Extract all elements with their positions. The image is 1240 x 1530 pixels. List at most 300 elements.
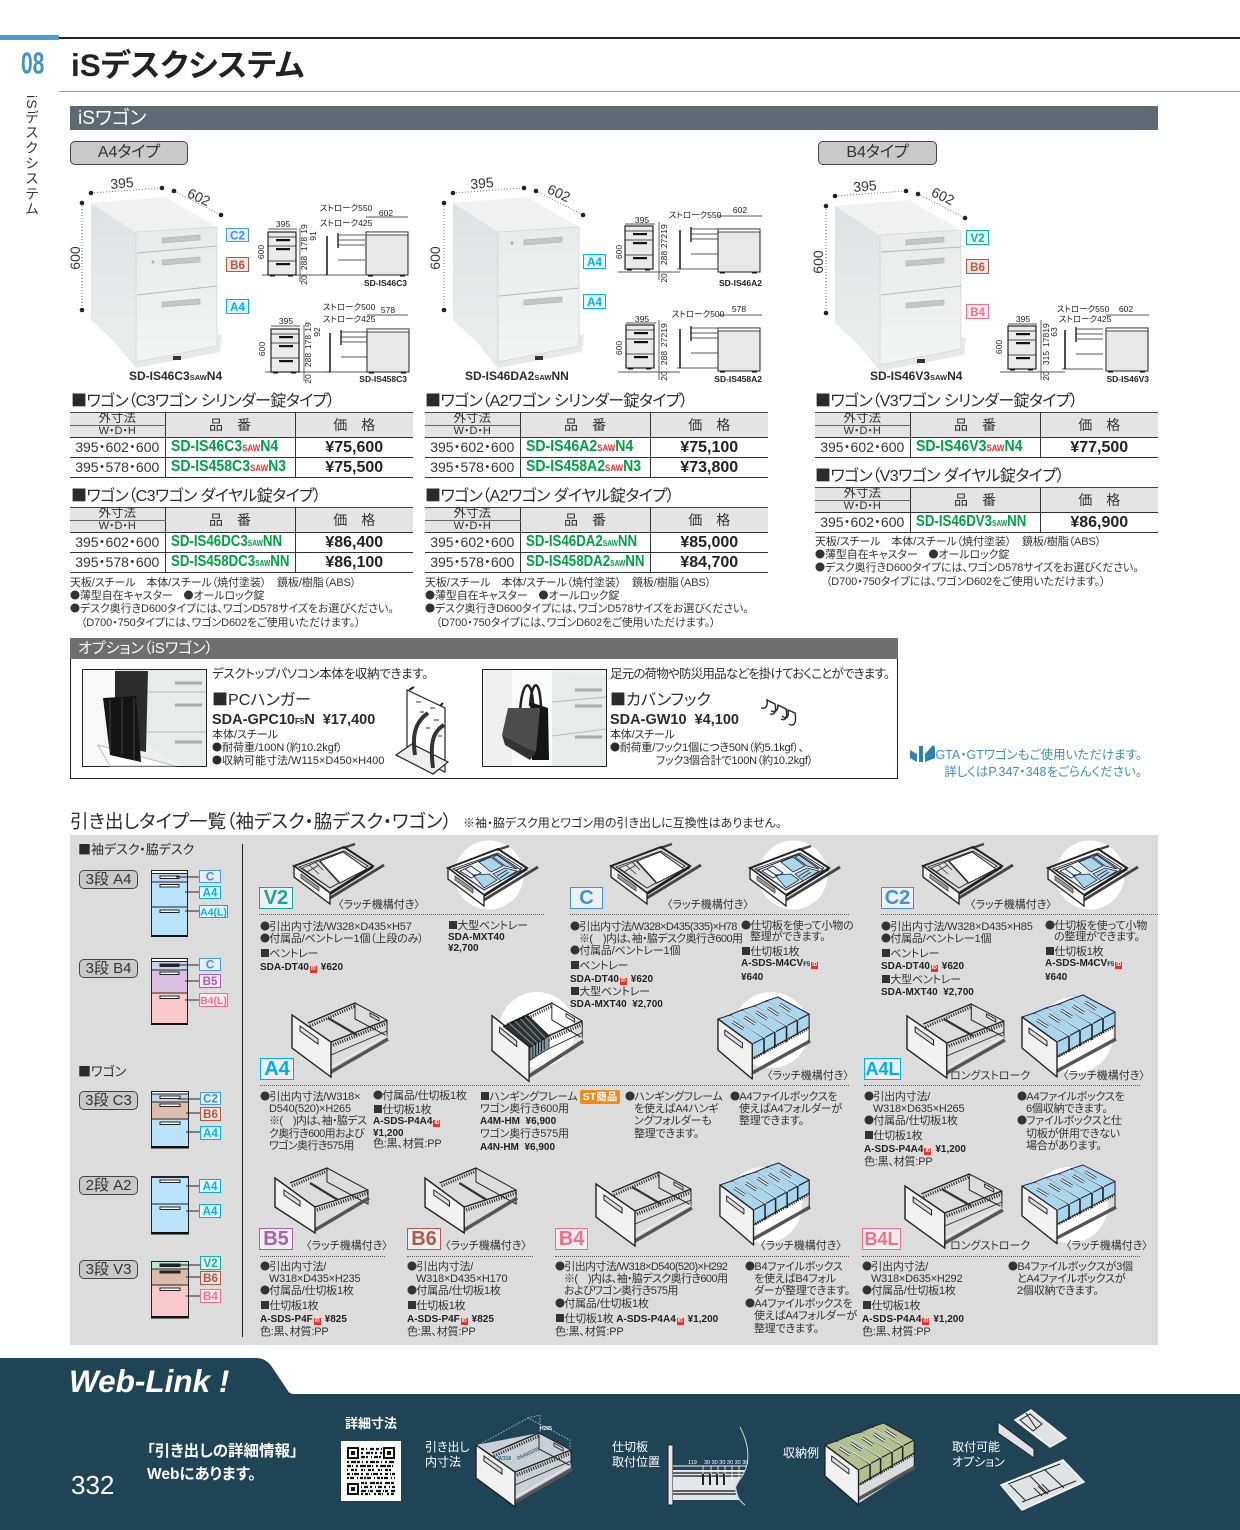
specs: PC hanger: 本体/スチール [212,729,278,741]
spec: B4: およびワゴン奥行き575用 [564,1285,678,1297]
section bar: iS wagon [70,106,1158,130]
spec: C2 divider [1045,920,1147,984]
spec: C2: ID [932,965,937,971]
badge: B4: B4 [559,1228,584,1250]
B4 type pill: B4タイプ [846,144,909,161]
table: V3 cylinder: 品 番 [954,417,996,433]
label: divider position: 仕切板 [612,1440,648,1454]
spec: A4 file box note: 整理できます。 [739,1115,804,1127]
spec: C2 divider: ID [1116,962,1121,968]
table: C3 dial: ¥86,400 [325,534,383,551]
illustration: V2 tray [292,842,385,906]
table: A2 dial [425,507,768,573]
dimension drawing: SD-IS458A2: 578 [732,304,746,314]
dimension drawing: SD-IS46C3: ストローク550 [319,203,373,213]
dimension drawing: SD-IS46A2: 600 [614,245,624,259]
spec: A4: ク奥行き600用および [269,1128,364,1140]
specs: bag hook: フック3個合計で100N（約10.2kgf） [656,755,813,767]
diagram: 3 tier A4: A4 [203,888,218,900]
subheading: side desk: ■袖デスク・脇デスク [78,839,194,858]
spec: C divider: 整理ができます。 ■仕切板1枚 [741,931,825,958]
product photo: V3 wagon: 395 [853,177,878,195]
spec: A4 accessory: ●付属品/仕切板1枚 ■仕切板1枚 [373,1086,467,1116]
diagram: 3 tier V3: B4 [203,1291,218,1303]
product photo: C3 wagon: 600 [67,246,83,270]
illustration: C tray with divider [745,838,845,912]
label: inner dimensions: 内寸法 [425,1454,461,1468]
dimension drawing: SD-IS46V3: SD-IS46V3 [1106,374,1149,384]
table: C3 dial: 395・602・600 [75,534,159,550]
illustration: C tray [607,840,702,910]
dimension drawing: SD-IS458A2: SD-IS458A2 [714,374,762,384]
table: A2 cylinder [425,412,768,478]
spec: B4: ※( )内は、袖・脇デスク奥行き600用 [564,1273,727,1285]
subheading: wagon: ■ワゴン [78,1061,126,1080]
dimension drawing: SD-IS458C3: 578 [381,305,395,315]
badge: C2: C2 [885,887,910,909]
spec: V2 large pen tray: ¥2,700 [448,943,479,954]
dimension drawing: SD-IS46V3: 600 [994,340,1004,354]
spec: A4 accessory: ¥1,200 [373,1128,404,1138]
spec: C2: ■大型ベントレー [881,971,961,986]
dimension drawing: SD-IS458C3: 288 [303,353,313,367]
panel: options [70,638,898,779]
table: C3 cylinder: ¥75,500 [325,459,383,476]
table: V3 cylinder: 価 格 [1078,417,1120,433]
icon: drawer with dimensions [474,1412,574,1514]
product photo: C3 wagon: C2 [230,230,245,242]
label: compatible options: オプション [952,1454,1005,1468]
notes: V3: 天板/スチール 本体/スチール（焼付塗装） 鏡板/樹脂（ABS） [815,536,1101,548]
model and price: PC hanger: SDA-GPC10F5N ¥17,400 [212,712,375,728]
dimension drawing: SD-IS46C3: 395 [276,219,290,229]
vertical chapter label: iSデスクシステム [24,95,40,217]
table: V3 cylinder: SD-IS46V3SAWN4 [916,438,1022,455]
spec: B4: 色:黒、材質:PP [555,1326,624,1338]
dimension drawing: SD-IS458A2: ストローク500 [671,309,725,319]
spec: A4 file box note: 使えばA4フォルダーが [739,1103,842,1115]
title: iSデスクシステム [71,47,304,83]
label: inner dimensions: 引き出し [425,1440,470,1454]
spec: A4 hanging frame: ■ハンギングフレーム [480,1088,578,1102]
spec: C divider: ●仕切板を使って小物の [741,916,853,932]
spec: A4: ※( )内は、袖・脇デス [269,1115,366,1127]
pill: 3 tier B4 [79,959,138,978]
spec: A4 hanging note: ングフォルダーも [634,1115,712,1127]
label: compatible options [952,1440,1005,1469]
dimension drawing: SD-IS46C3: SD-IS46C3 [364,278,407,288]
specs: PC hanger: ●耐荷重/100N（約10.2kgf） [212,739,342,754]
spec: C: ID [621,978,626,984]
spec: B4L note: 2個収納できます。 [1017,1285,1099,1297]
A4 type pill: A4タイプ [98,144,160,161]
spec: A4L note: 場合があります。 [1026,1140,1102,1152]
table: V3 dial: ¥86,900 [1070,514,1128,531]
badge: A4L: A4L [865,1059,900,1079]
dimension drawing: SD-IS46A2: 19 [659,224,669,234]
text: bag hook description: 足元の荷物や防災用品などを掛けておくことができます。 [610,667,889,681]
dimension drawing: SD-IS46A2: 20 [659,273,669,283]
spec: A4L: ●付属品/仕切板1枚 ■仕切板1枚 [864,1112,958,1142]
dimension drawing: SD-IS46V3 [994,304,1149,384]
A4 type pill [70,141,188,165]
model and price: bag hook: SDA-GW10 ¥4,100 [610,712,739,728]
table: C3 dial: 品 番 [209,512,251,528]
table: A2 dial: 395・602・600 [430,534,514,550]
table: C3 cylinder: 価 格 [333,417,375,433]
badge: C: C [579,887,594,909]
spec: A4 accessory: ID [434,1120,439,1126]
spec: A4 hanging frame: A4M-HM ¥6,900 [480,1116,556,1127]
product photo: C3 wagon: 602 [185,185,213,209]
panel: Web-Link footer [0,1358,1240,1530]
spec: B6: ●引出内寸法/ [407,1258,473,1272]
spec: C divider: ¥640 [741,972,763,983]
product photo: C3 wagon: A4 [230,302,245,314]
dimension drawing: SD-IS46V3: 178 [1041,333,1051,347]
spec: B4L: W318×D635×H292 [871,1273,962,1285]
spec: C2: ●付属品/ベントレー1個 ■ベントレー [881,930,991,960]
illustration: A4 hanging frame [488,990,588,1084]
spec: V2 [260,921,423,974]
spec: C2 divider: A-SDS-M4CVF5 [1045,958,1114,969]
label: compatible options: 取付可能 [952,1440,1000,1454]
spec: C divider: ID [812,962,817,968]
options header [70,638,898,659]
badge: B5: B5 [263,1228,289,1250]
specs: bag hook: 本体/スチール [610,729,675,741]
options header: オプション（iSワゴン） [78,640,213,657]
badge: B6: B6 [411,1228,437,1250]
heading: bag hook: ■カバンフック [610,686,711,710]
spec: A4L note [1017,1090,1125,1153]
spec: B6: A-SDS-P4F ¥825 [407,1314,494,1325]
dimension drawing: SD-IS458C3: 20 [303,374,313,384]
diagram: 3 tier B4: B5 [203,976,218,988]
product photo: A2 wagon: A4 [587,257,602,269]
pill: 3 tier A4 [79,870,138,889]
notes: C3: 天板/スチール 本体/スチール（焼付塗装） 鏡板/樹脂（ABS） [70,577,356,589]
table: A2 cylinder: SD-IS46A2SAWN4 [526,438,633,455]
table: C3 cylinder: 395・602・600 [75,439,159,455]
dimension drawing: SD-IS46V3: 20 [1041,371,1051,381]
table: A2 dial: 価 格 [688,512,730,528]
pill: 2 tier A2 [79,1176,138,1195]
notes: C3: ●デスク奥行きD600タイプには、ワゴンD578サイズをお選びください。 [70,600,394,615]
diagram: 3 tier V3: V2 [203,1258,218,1270]
table: A2 cylinder: ¥75,100 [680,439,738,456]
latch note: 〈ラッチ機構付き〉 [667,899,749,911]
spec: B6: 色:黒、材質:PP [407,1326,476,1338]
table: C3 dial: 395・578・600 [75,554,159,570]
page number: 332 [71,1470,114,1500]
spec: C2 divider: ●仕切板を使って小物 [1045,916,1147,932]
dimension drawing: SD-IS46A2: 272 [659,234,669,248]
latch note: 〈ラッチ機構付き〉 [445,1240,527,1252]
spec: B5: ID [315,1318,320,1324]
table: V3 dial: 395・602・600 [820,514,904,530]
dimension drawing: SD-IS46C3: 91 [308,231,318,241]
table: A2 cylinder: 価 格 [688,417,730,433]
dimension drawing: SD-IS458C3: 395 [279,316,293,326]
notes: C3 [70,576,394,629]
table: C3 cylinder: 395・578・600 [75,459,159,475]
dimension drawing: SD-IS458A2: 395 [635,314,649,324]
table: C3 cylinder: 品 番 [209,417,251,433]
dimension drawing: SD-IS458C3: 178 [303,335,313,349]
spec: A4L note: ●ファイルボックスと仕 [1017,1112,1122,1127]
table: V3 cylinder: ¥77,500 [1070,439,1128,456]
dimension drawing: SD-IS46C3 [256,203,408,288]
spec: A4L: 色:黒、材質:PP [864,1156,932,1168]
dimension drawing: SD-IS46V3: 315 [1041,351,1051,365]
spec: A4 [260,1090,366,1153]
spec: A4L note: ●A4ファイルボックスを [1017,1088,1125,1102]
spec: B4 note: 整理できます。 [754,1323,819,1335]
spec: B4 note: ●A4ファイルボックスを [745,1295,853,1310]
notes: A2: ●薄型自在キャスター ●オールロック錠 [425,587,619,602]
spec: C2 divider: の整理ができます。 ■仕切板1枚 [1045,931,1140,958]
table: A2 cylinder: 395・578・600 [430,459,514,475]
diagram: 2 tier A2: A4 [203,1181,218,1193]
badge: B4L: B4L [864,1229,898,1249]
web info text [147,1441,298,1486]
icon: drawer with dimensions: W318 [498,1456,511,1462]
diagram: 2 tier A2: A4 [203,1206,218,1218]
spec: C: ●付属品/ベントレー1個 ■ベントレー [570,942,680,972]
diagram: 3 tier B4: C [206,960,214,972]
spec: A4 hanging note: 整理できます。 [634,1128,699,1140]
illustration: B4L drawer [903,1172,1005,1252]
spec: B5: ●付属品/仕切板1枚 ■仕切板1枚 [260,1282,354,1312]
spec: A4L note: 切板が併用できない [1026,1128,1120,1140]
latch note: 〈ラッチ機構付き〉 [970,899,1052,911]
icon: PC hanger [394,686,449,775]
detail size label: 詳細寸法 [345,1416,397,1431]
product photo: V3 wagon [810,177,989,371]
illustration: B5 drawer [272,1165,372,1237]
icon: bag hook [760,698,796,726]
pill: 3 tier V3 [79,1260,138,1279]
table: A2 cylinder: SD-IS458A2SAWN3 [526,458,641,475]
icon: GTA book [910,745,935,762]
spec: A4 accessory: 色:黒、材質:PP [373,1138,442,1150]
icon: storage example [821,1420,917,1508]
dimension drawing: SD-IS458A2: 288 [659,351,669,365]
spec: V2 large pen tray [448,921,528,954]
dimension drawing: SD-IS458C3 [257,302,410,384]
illustration: B4 file box [716,1160,814,1250]
illustration: V2 tray with insert [446,840,539,910]
model name: V3: SD-IS46V3SAWN4 [870,369,962,383]
spec: B5 [260,1260,360,1338]
notes: C3: （D700・750タイプには、ワゴンD602をご使用いただけます。） [81,617,360,629]
dimension drawing: SD-IS46C3: 178 [299,237,309,251]
spec: B4 [555,1260,727,1338]
spec: B5: W318×D435×H235 [269,1273,360,1285]
notes: A2: 天板/スチール 本体/スチール（焼付塗装） 鏡板/樹脂（ABS） [425,577,711,589]
spec: A4L: ●引出内寸法/ [864,1088,930,1102]
chapter number: 08 [21,46,44,80]
product photo: V3 wagon: V2 [970,233,985,245]
illustration: A4L drawer [905,1002,1007,1082]
chapter tab [0,35,59,40]
diagram: 3 tier A4 [151,870,228,937]
product photo: C3 wagon: B6 [230,260,245,272]
spec: V2 large pen tray: SDA-MXT40 [448,932,505,943]
table: V3 dial [815,487,1158,533]
notes: A2 [425,576,749,629]
spec: V2: ID [311,966,316,972]
dimension drawing: SD-IS46V3: 19 [1041,323,1051,333]
diagram: 3 tier C3: A4 [203,1128,218,1140]
spec: C2: SDA-DT40 ¥620 [881,961,964,972]
heading: V3 cylinder: ■ワゴン（V3ワゴン シリンダー錠タイプ） [815,387,1078,411]
spec: C2 divider: ¥640 [1045,972,1067,983]
notes: A2: ●デスク奥行きD600タイプには、ワゴンD578サイズをお選びください。 [425,600,749,615]
notes: A2: （D700・750タイプには、ワゴンD602をご使用いただけます。） [436,617,715,629]
dimension drawing: SD-IS46C3: 20 [299,275,309,285]
dimension drawing: SD-IS458C3: 600 [257,342,267,356]
dimension drawing: SD-IS458C3: ストローク425 [322,314,376,324]
spec: C2: SDA-MXT40 ¥2,700 [881,987,974,998]
diagram: 3 tier C3: C2 [203,1094,218,1106]
diagram: 3 tier B4: B4(L) [200,995,227,1007]
spec: B4 note: ダーが整理できます。 [754,1285,850,1297]
latch note: 〈ラッチ機構付き〉 [767,1070,849,1082]
diagram: 2 tier A2 [151,1176,221,1234]
text: GTA note [935,748,1142,779]
specs: PC hanger: ●収納可能寸法/W115×D450×H400 [212,752,384,767]
Web-Link logo: Web-Link ! [69,1363,229,1399]
dimension drawing: SD-IS458A2: 600 [614,341,624,355]
dimension drawing: SD-IS46V3: ストローク550 [1056,304,1110,314]
text: GTA note: GTA・GTワゴンもご使用いただけます。 [935,748,1142,762]
model name: A2: SD-IS46DA2SAWNN [465,369,569,383]
table: V3 dial: SD-IS46DV3SAWNN [916,513,1026,530]
product photo: C3 wagon [67,174,249,368]
spec: V2: ●付属品/ベントレー1個（上段のみ） ■ベントレー [260,930,423,960]
text: PC hanger description: デスクトップパソコン本体を収納できます。 [212,667,428,681]
spec: C: SDA-DT40 ¥620 [570,974,653,985]
pill: 3 tier C3: 3段 C3 [85,1092,132,1109]
panel: drawer types [70,835,1158,1345]
QR code [341,1441,401,1501]
dimension drawing: SD-IS458C3: 19 [303,322,313,332]
badge: ST product: ST商品 [583,1091,617,1103]
product photo: A2 wagon [427,174,606,368]
specs: bag hook: ●耐荷重/フック1個につき50N（約5.1kgf）、 [610,739,804,754]
footer background [0,1358,1240,1530]
table: A2 cylinder: 395・602・600 [430,439,514,455]
dimension drawing: SD-IS458C3: 92 [312,327,322,337]
dimension drawing: SD-IS458A2: 20 [659,371,669,381]
illustration: C2 tray with divider [1045,838,1135,912]
spec: A4L: ID [925,1148,930,1154]
dimension drawing: SD-IS458C3: ストローク500 [322,302,376,312]
spec: B5: ●引出内寸法/ [260,1258,326,1272]
spec: B4L note: とA4ファイルボックスが [1017,1273,1125,1285]
long stroke note: ロングストローク [950,1070,1030,1082]
spec: B6: W318×D435×H170 [416,1273,507,1285]
spec: B4L: A-SDS-P4A4 ¥1,200 [862,1314,964,1325]
illustration: A4 drawer [290,1000,390,1082]
latch note: 〈ラッチ機構付き〉 [1063,1070,1145,1082]
table: V3 dial: 品 番 [954,492,996,508]
badge: V2: V2 [264,887,288,909]
table: C3 dial [70,507,413,573]
spec: A4: ワゴン奥行き575用 [269,1140,354,1152]
spec: B4: ●付属品/仕切板1枚 ■仕切板1枚 A-SDS-P4A4 ¥1,200 [555,1295,718,1325]
spec: B6 [407,1260,507,1338]
spec: A4 file box note: ●A4ファイルボックスを [730,1088,838,1102]
spec: C2 [881,920,1033,999]
dimension drawing: SD-IS458A2: 19 [659,323,669,333]
notes: V3 [815,536,1139,588]
table: A2 dial: ¥84,700 [680,554,738,571]
spec: A4 hanging frame [480,1090,578,1154]
diagram: 3 tier A4: A4(L) [200,906,227,918]
dimension drawing: SD-IS46A2: SD-IS46A2 [719,278,762,288]
spec: A4L note: 6個収納できます。 [1026,1103,1108,1115]
heading: PC hanger: ■PCハンガー [212,686,311,710]
spec: A4L [864,1090,966,1168]
spec: A4: D540(520)×H265 [269,1103,351,1115]
product photo: V3 wagon: B6 [970,262,985,274]
spec: B4L: 色:黒、材質:PP [862,1326,930,1338]
spec: A4 file box note [730,1090,842,1128]
heading: C3 cylinder: ■ワゴン（C3ワゴン シリンダー錠タイプ） [71,387,334,411]
dimension drawing: SD-IS46V3: 602 [1119,304,1133,314]
note: compatibility: ※袖・脇デスク用とワゴン用の引き出しに互換性はありません。 [463,816,782,830]
label: inner dimensions [425,1440,470,1469]
table: C3 dial: SD-IS458DC3SAWNN [170,553,289,570]
icon: divider position: 119 [688,1460,697,1466]
spec: C: ■大型ベントレー [570,983,650,998]
dimension drawing: SD-IS46C3: 600 [256,245,266,259]
spec: B4 note [745,1260,857,1335]
spec: B5: A-SDS-P4F ¥825 [260,1314,347,1325]
spec: B4L [862,1260,964,1338]
text: GTA note: 詳しくはP.347・348をごらんください。 [944,765,1142,779]
dimension drawing: SD-IS46C3: 19 [299,224,309,234]
web info text: 「引き出しの詳細情報」 [147,1443,298,1460]
heading: V3 dial: ■ワゴン（V3ワゴン ダイヤル錠タイプ） [815,462,1064,486]
icon: drawer with dimensions: D540(520) [516,1446,541,1462]
dimension drawing: SD-IS46C3: 288 [299,256,309,270]
dimension drawing: SD-IS46A2: 288 [659,251,669,265]
spec: V2: ●引出内寸法/W328×D435×H57 [260,918,412,933]
table: A2 dial: SD-IS46DA2SAWNN [526,533,637,550]
label: divider position [612,1440,660,1469]
pill: 3 tier B4: 3段 B4 [86,960,131,977]
spec: C: ※( )内は、袖・脇デスク奥行き600用 [579,933,742,945]
product photo: V3 wagon: 602 [929,184,957,208]
diagram: 3 tier V3 [151,1256,221,1318]
spec: B4L: ●引出内寸法/ [862,1258,928,1272]
spec: B4L: ●付属品/仕切板1枚 ■仕切板1枚 [862,1282,956,1312]
spec: B6: ID [462,1318,467,1324]
illustration: A4 file box [714,990,814,1084]
spec: A4 hanging note: ●ハンギングフレーム [625,1088,723,1102]
spec: A4L: W318×D635×H265 [873,1103,964,1115]
photo: PC hanger [82,669,207,767]
table: V3 dial: 価 格 [1078,492,1120,508]
notes: V3: ●デスク奥行きD600タイプには、ワゴンD578サイズをお選びください。 [815,559,1139,574]
illustration: B4 drawer [593,1168,695,1248]
label: storage example: 収納例 [783,1446,819,1460]
pill: 2 tier A2: 2段 A2 [86,1177,131,1194]
